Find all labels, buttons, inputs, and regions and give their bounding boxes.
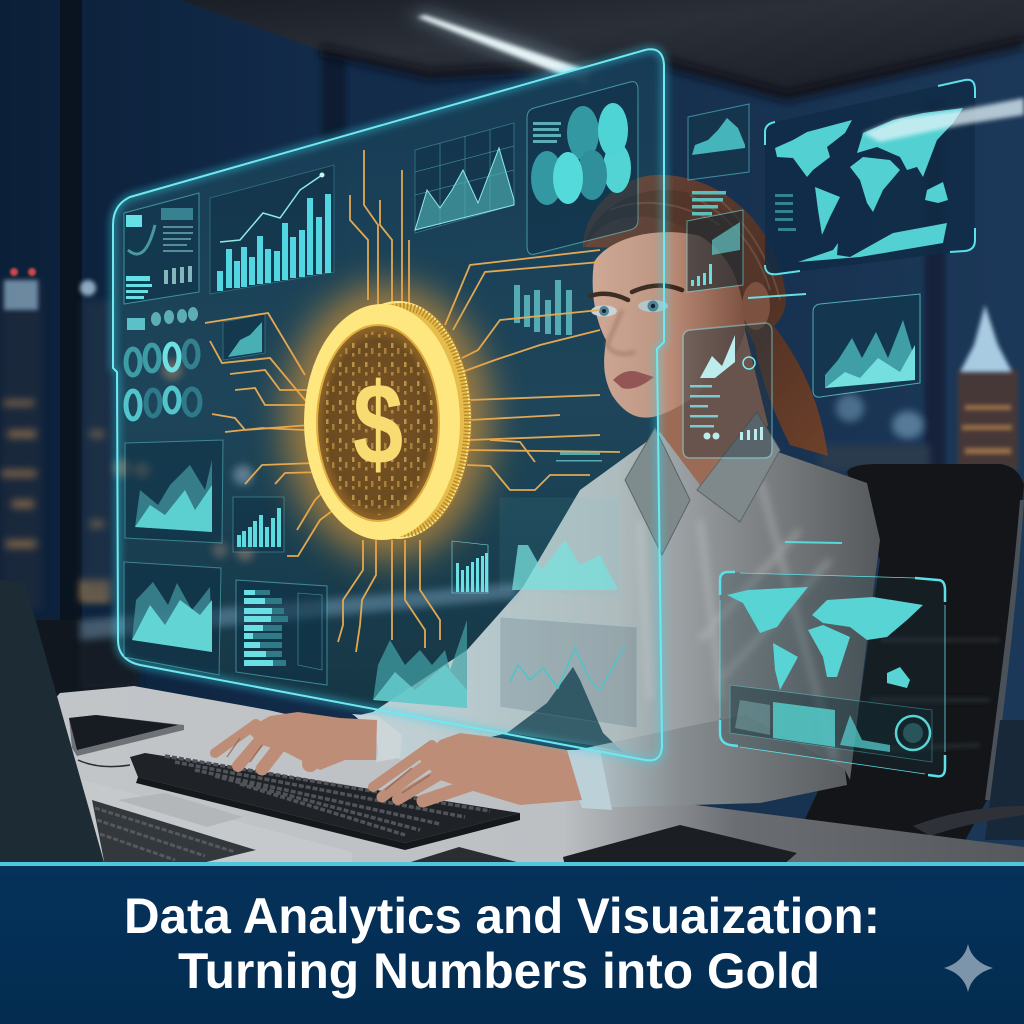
ribbed edge <box>338 307 468 533</box>
panel backing <box>113 49 664 760</box>
area chart bottom left <box>124 562 221 675</box>
map continents <box>775 108 963 262</box>
title banner <box>0 866 1024 1024</box>
laptop screen <box>0 580 104 862</box>
donut gauges <box>126 341 200 419</box>
laptop keyboard <box>92 800 256 866</box>
icon strip <box>127 307 198 330</box>
brows <box>590 285 682 300</box>
city bokeh <box>113 360 254 561</box>
hair fringe <box>583 190 765 320</box>
matrix digits <box>322 331 434 515</box>
ceiling light <box>405 10 600 90</box>
laptop base <box>82 780 352 866</box>
streak over map <box>863 98 1024 142</box>
eyes <box>591 300 668 316</box>
left hand <box>215 712 377 770</box>
world map panel <box>765 80 975 274</box>
area chart top <box>415 123 514 233</box>
ponytail and hair <box>583 175 828 456</box>
coin front <box>304 304 460 540</box>
bottom keyboard and tablet <box>398 825 797 866</box>
icon: sparkle <box>944 944 993 992</box>
lower world map panel <box>720 572 945 776</box>
office chair <box>800 464 1024 850</box>
lower strip charts <box>730 685 932 762</box>
title line 2: Turning Numbers into Gold <box>178 943 820 999</box>
window streak <box>80 583 517 640</box>
panel edge <box>113 49 664 760</box>
banner accent line <box>0 862 1024 866</box>
shirt sleeve and torso <box>355 412 880 780</box>
area chart panel right <box>813 294 920 397</box>
forearm sleeve <box>567 715 847 808</box>
laptop <box>0 580 352 866</box>
external keyboard <box>130 753 520 850</box>
ear <box>742 282 770 330</box>
floating line <box>748 294 806 298</box>
lips <box>613 371 654 389</box>
gold coin <box>284 284 492 560</box>
panel glow <box>113 49 664 760</box>
dollar sign: $ <box>353 360 403 490</box>
shirt folds <box>640 480 835 760</box>
horizontal bars panel <box>236 580 327 685</box>
short line above lower map <box>785 542 842 543</box>
face <box>593 232 745 418</box>
neck <box>655 330 768 520</box>
right hand <box>373 733 582 805</box>
gap tint below sleeve <box>507 667 623 752</box>
data columns behind face <box>514 280 602 462</box>
tablet on desk <box>69 715 184 767</box>
collar <box>625 412 780 555</box>
floating dashboard near hair <box>687 191 743 292</box>
lower map continents <box>727 587 923 690</box>
holographic panel <box>80 49 664 760</box>
panel glass tint <box>113 49 664 760</box>
right cuff <box>560 750 612 810</box>
circles panel <box>527 82 638 254</box>
coin rim edge <box>326 302 470 538</box>
title line 1: Data Analytics and Visuaization: <box>124 888 880 944</box>
small bars panel <box>233 497 284 552</box>
bottom area chart and translucent charts <box>373 498 637 728</box>
hair strands <box>610 195 780 300</box>
nose shadow <box>607 310 635 354</box>
floating small chart <box>688 104 749 180</box>
area chart lower left <box>125 440 223 543</box>
bar and line chart <box>210 165 334 294</box>
coin glow <box>284 284 492 560</box>
floating phone panel <box>683 323 772 458</box>
mini area strip <box>223 314 265 360</box>
distant tower <box>820 305 1018 470</box>
woman <box>355 175 880 808</box>
desk <box>0 686 1024 866</box>
circuit traces <box>205 150 620 652</box>
chair arm <box>913 806 1024 836</box>
left sleeve cuff <box>352 714 402 762</box>
trackpad <box>118 793 243 827</box>
coin face <box>317 325 439 521</box>
mini dashboard top left <box>124 193 199 304</box>
